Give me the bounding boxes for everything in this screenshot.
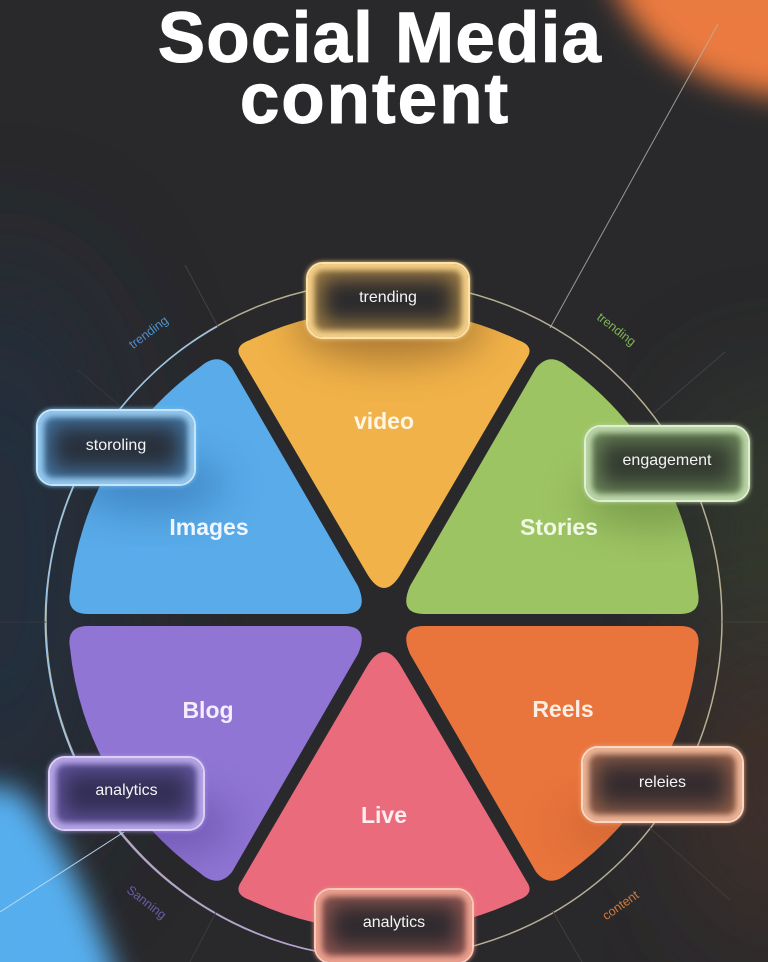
wedge: video	[238, 290, 530, 588]
background glows	[0, 260, 768, 940]
badge: releies	[581, 746, 744, 823]
badge: trending: trending	[359, 288, 417, 306]
badge: analytics bottom: analytics	[363, 914, 425, 931]
wedge: images: Images	[169, 514, 249, 540]
badge: releies: releies	[639, 774, 686, 790]
wedge: video: video	[354, 408, 414, 434]
wedge: reels: Reels	[532, 696, 594, 722]
wedge: blog	[69, 626, 362, 881]
wedge: stories: Stories	[520, 514, 598, 540]
outer ring	[46, 282, 722, 958]
wedge: blog: Blog	[182, 697, 234, 723]
blue corner blob	[0, 786, 122, 962]
rotated label: green: trending	[594, 310, 639, 349]
title: Social Media	[158, 0, 602, 78]
wedge: live	[238, 652, 530, 930]
wedge: reels	[406, 626, 699, 881]
badge: analytics left	[48, 756, 205, 831]
rotated label: purple: Sanning	[124, 883, 169, 922]
badge: trending	[306, 262, 470, 339]
badge: storoling	[36, 409, 196, 486]
badge: analytics bottom	[314, 888, 474, 962]
badge: storoling: storoling	[86, 436, 146, 454]
badge: engagement: engagement	[623, 452, 711, 468]
ring tint lower left	[122, 835, 320, 952]
badge: analytics left: analytics	[95, 782, 158, 798]
wedge: images	[69, 359, 362, 614]
orange corner blob	[606, 0, 768, 100]
badge: engagement	[584, 425, 750, 502]
title: content	[240, 60, 510, 139]
title	[158, 0, 602, 139]
rotated label: blue: trending	[126, 313, 171, 352]
rotated label: orange: content	[600, 888, 642, 923]
ring tint left	[45, 326, 218, 835]
wedge: stories	[406, 359, 720, 614]
wedge: live: Live	[361, 802, 407, 828]
